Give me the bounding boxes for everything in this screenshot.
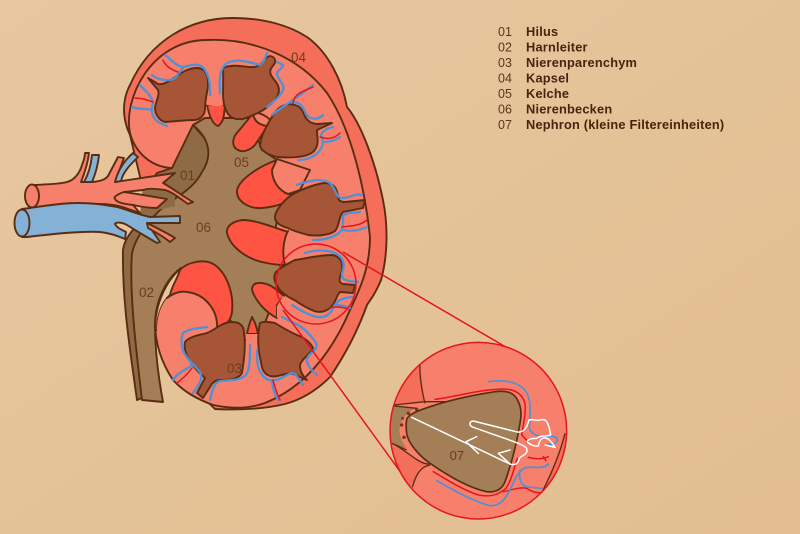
kidney illustration: 03 bbox=[227, 361, 242, 376]
capsule areas bbox=[395, 366, 424, 404]
legend: 02 bbox=[498, 40, 512, 54]
legend bbox=[498, 24, 724, 132]
kidney illustration: 05 bbox=[234, 155, 249, 170]
labels on kidney: 01 bbox=[180, 168, 195, 183]
connector lines bbox=[283, 252, 523, 481]
lower-left parenchyma lobe bbox=[157, 292, 217, 360]
pyramid 4 bbox=[275, 183, 365, 236]
parenchyma lobe beside calyx three bbox=[272, 159, 310, 194]
pelvis fill over papilla edge bbox=[392, 406, 414, 448]
legend: Nephron (kleine Filtereinheiten) bbox=[526, 117, 724, 132]
calyx two bbox=[233, 113, 267, 151]
red capillaries bbox=[433, 389, 548, 496]
blue capillaries bbox=[437, 381, 557, 506]
kidney illustration: 04 bbox=[291, 50, 307, 65]
bottom papilla bbox=[246, 334, 260, 346]
kidney illustration: 06 bbox=[196, 220, 211, 235]
renal vein bbox=[14, 153, 180, 243]
nephron detail circle bbox=[387, 342, 567, 519]
kidney illustration: 02 bbox=[139, 285, 154, 300]
legend: Nierenbecken bbox=[526, 102, 612, 116]
renal pelvis and ureter bbox=[131, 118, 283, 402]
pelvis area bbox=[392, 444, 394, 446]
pyramid 7 bbox=[258, 322, 313, 380]
renal sinus dark band bbox=[123, 125, 260, 400]
label 07: 07 bbox=[450, 448, 464, 463]
parenchyma lobe under pyramid five bbox=[277, 296, 298, 318]
pyramid 2 bbox=[223, 56, 279, 119]
dots bbox=[400, 408, 418, 439]
renal artery bbox=[25, 153, 193, 213]
artery end bbox=[25, 184, 39, 208]
vein end bbox=[14, 210, 30, 236]
legend: Kapsel bbox=[526, 70, 569, 86]
bottom calyx bbox=[247, 317, 258, 334]
white nephron tubule bbox=[412, 417, 555, 465]
renal veins and arteries bbox=[132, 53, 367, 400]
legend: 06 bbox=[498, 102, 512, 116]
zoom circle on kidney bbox=[276, 244, 356, 324]
tan sliver beside ureter bbox=[155, 268, 181, 330]
pyramid 5 bbox=[274, 255, 355, 312]
legend: 04 bbox=[498, 72, 512, 86]
renal parenchyma bbox=[129, 40, 370, 408]
vein branches bbox=[84, 155, 99, 182]
legend: Nierenparenchym bbox=[526, 55, 637, 70]
calyx five bbox=[252, 283, 284, 318]
calyx under top pyramids bbox=[207, 105, 225, 126]
pyramid bbox=[406, 391, 521, 492]
legend: Hilus bbox=[526, 24, 558, 39]
pink papilla bbox=[393, 402, 448, 464]
legend: 01 bbox=[498, 25, 512, 39]
legend: Harnleiter bbox=[526, 40, 588, 54]
kidney illustration bbox=[14, 18, 387, 409]
calyx three bbox=[237, 160, 296, 208]
parenchyma lobe beside calyx four bbox=[283, 229, 312, 265]
pyramid 1 bbox=[148, 68, 208, 122]
fine blue veins bbox=[165, 55, 210, 95]
pyramid 6 bbox=[185, 322, 245, 398]
dark sinus patch behind vessels bbox=[140, 180, 175, 214]
legend: 05 bbox=[498, 87, 512, 101]
legend: 07 bbox=[498, 118, 512, 132]
calyx four bbox=[227, 220, 288, 265]
legend: Kelche bbox=[526, 86, 569, 101]
legend: 03 bbox=[498, 56, 512, 70]
artery lower branch line bbox=[115, 192, 133, 205]
fine red arteries bbox=[163, 60, 178, 72]
pyramid 3 bbox=[260, 104, 332, 157]
papilla pink top bbox=[205, 97, 226, 106]
small artery branch bbox=[147, 223, 175, 242]
kidney capsule bbox=[124, 18, 387, 409]
lower-left calyx bbox=[170, 261, 232, 330]
